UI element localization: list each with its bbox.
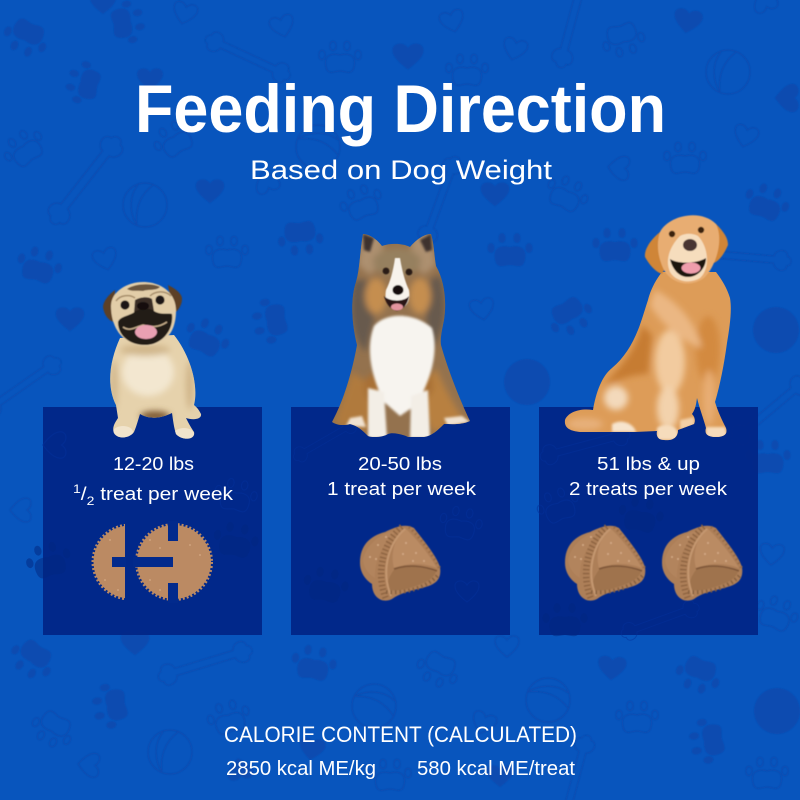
subtitle: Based on Dog Weight: [250, 155, 553, 185]
icon: folded treat right: [662, 526, 742, 601]
dose label: weight: 51 lbs & up: [597, 454, 700, 474]
dose label: half treat: 1: [73, 482, 81, 496]
collie face: [383, 258, 412, 311]
dog: collie: [332, 234, 470, 437]
panel background: [539, 407, 758, 635]
panel pattern: [290, 415, 484, 605]
panel background: [43, 407, 262, 635]
title: Feeding Direction: [135, 71, 666, 147]
dose label: two treats: 2 treats per week: [569, 479, 728, 499]
dose label: half treat: treat per week: [94, 484, 234, 504]
dog: golden retriever: [560, 215, 735, 445]
dose label: half treat: /: [81, 484, 87, 504]
icon: half treat pieces: [93, 521, 212, 603]
dog: pug: [102, 281, 202, 439]
panel: 51 lbs and up: [533, 407, 758, 643]
calorie heading: CALORIE CONTENT (CALCULATED): [224, 722, 577, 747]
panel: 20-50 lbs: [290, 407, 510, 635]
icon: folded treat left: [565, 526, 645, 601]
calorie value per treat: 580 kcal ME/treat: [417, 758, 575, 780]
panel pattern: [533, 424, 702, 643]
dose label: half treat: 2: [87, 494, 95, 508]
calorie value per kg: 2850 kcal ME/kg: [226, 758, 376, 780]
golden retriever head: [645, 215, 728, 284]
panel: 12-20 lbs: [22, 407, 262, 635]
dose label: one treat: 1 treat per week: [327, 479, 477, 499]
pug head: [103, 282, 182, 346]
dose label: weight: 12-20 lbs: [113, 454, 194, 474]
panel background: [291, 407, 510, 635]
icon: folded treat: [360, 526, 440, 601]
panel pattern: [22, 432, 261, 582]
dose label: weight: 20-50 lbs: [358, 454, 442, 474]
